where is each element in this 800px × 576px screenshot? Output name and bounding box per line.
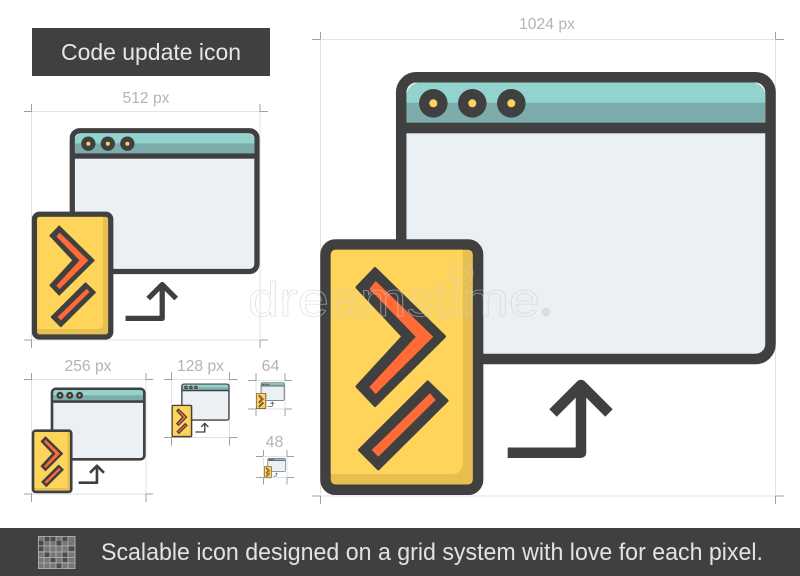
size label: 128 px: 128 px bbox=[177, 358, 224, 375]
256 px icon group bbox=[24, 358, 153, 502]
icon copy bbox=[264, 458, 285, 478]
footer banner bbox=[0, 528, 800, 576]
icon copy bbox=[33, 389, 144, 492]
icon copy bbox=[172, 384, 229, 437]
guide frame bbox=[256, 450, 294, 484]
browser window bbox=[401, 77, 771, 359]
watermark: dreamstime bbox=[248, 274, 540, 327]
large icon guide frame, 1024 px bbox=[312, 32, 784, 504]
upload arrow bbox=[508, 385, 609, 453]
guide frame bbox=[248, 373, 292, 416]
512 px icon group bbox=[24, 90, 268, 348]
64 px icon group bbox=[248, 358, 292, 416]
yellow phone with code symbol bbox=[326, 244, 478, 490]
guide frame bbox=[24, 373, 153, 502]
size label: 64: 64 bbox=[262, 358, 280, 375]
48 px icon group bbox=[256, 434, 294, 484]
size label: 48: 48 bbox=[266, 434, 284, 451]
footer text: Scalable icon designed on a grid system with love for each pixel. bbox=[101, 539, 763, 566]
icon copy bbox=[34, 131, 257, 337]
title banner: Code update icon bbox=[61, 39, 241, 65]
guide frame bbox=[24, 104, 268, 348]
size label: 1024 px: 1024 px bbox=[519, 16, 575, 33]
128 px icon group bbox=[164, 358, 238, 446]
slash bbox=[360, 382, 447, 469]
large code update icon bbox=[326, 77, 771, 490]
chevron bbox=[357, 268, 444, 406]
size label: 256 px: 256 px bbox=[64, 358, 112, 375]
size label: 512 px: 512 px bbox=[122, 90, 170, 107]
icon copy bbox=[256, 383, 284, 409]
watermark bbox=[248, 261, 550, 327]
grid icon bbox=[38, 536, 76, 569]
title banner bbox=[32, 28, 270, 76]
guide frame bbox=[164, 372, 238, 446]
